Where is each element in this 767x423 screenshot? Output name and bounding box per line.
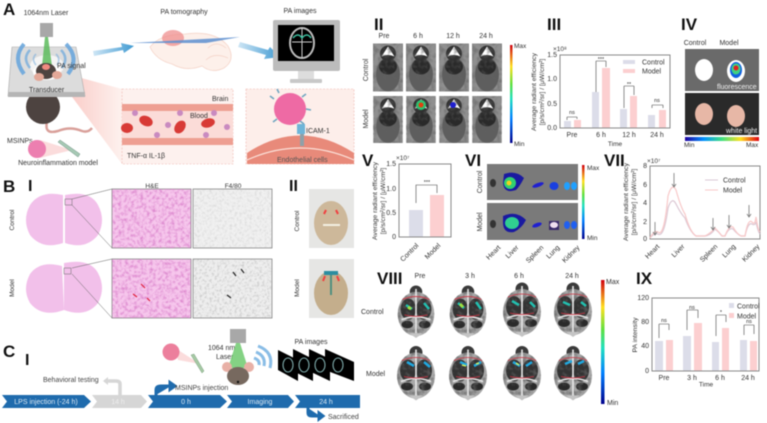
bars bbox=[409, 195, 444, 237]
significance brackets: ** bbox=[627, 82, 632, 88]
heading: IX: IX bbox=[636, 269, 653, 288]
row label: control: Control bbox=[477, 170, 484, 193]
x tick labels: 24 h bbox=[650, 132, 664, 139]
panel VI: organ fluorescence bbox=[465, 151, 600, 265]
label: PA images: PA images bbox=[295, 339, 328, 346]
organ labels: Lung bbox=[721, 243, 737, 259]
y tick labels: 0 bbox=[645, 368, 649, 375]
label: H&E: H&E bbox=[145, 183, 159, 190]
image: fluorescence bbox=[685, 49, 759, 91]
label: blood: Blood bbox=[190, 113, 208, 120]
label: neuroinflammation model: Neuroinflammation model bbox=[18, 160, 98, 167]
y tick labels: 0 bbox=[643, 236, 647, 243]
significance brackets: * bbox=[720, 310, 723, 316]
icon: PA signal waves bbox=[18, 44, 74, 74]
column labels: Pre bbox=[415, 273, 426, 280]
legend: Control bbox=[642, 60, 665, 66]
row label: control II: Control bbox=[294, 210, 301, 231]
panel V: brain bar chart bbox=[362, 151, 451, 263]
heading: A: A bbox=[3, 0, 15, 19]
column labels: 6 h bbox=[514, 273, 524, 280]
y tick labels: 8 bbox=[643, 163, 647, 170]
heading: V: V bbox=[362, 151, 374, 170]
panel IX: PA intensity bar chart bbox=[632, 269, 760, 388]
brain images: control row bbox=[397, 282, 593, 339]
y tick labels: 80 bbox=[641, 319, 649, 326]
x tick labels bbox=[567, 132, 664, 139]
colorbar max: Max bbox=[514, 43, 527, 50]
timeline chevron: 0 h bbox=[148, 395, 227, 408]
colorbar max: Max bbox=[587, 165, 600, 172]
image: F4/80 control bbox=[193, 189, 272, 248]
column labels: Control bbox=[684, 40, 707, 47]
label: 1064nm laser: 1064nm Laser bbox=[24, 10, 69, 17]
colorbar bbox=[685, 137, 759, 141]
significance brackets: ns bbox=[689, 305, 695, 311]
legend: Model bbox=[723, 188, 743, 194]
y tick labels: 4 bbox=[643, 200, 647, 207]
colorbar max: Max bbox=[746, 142, 759, 149]
label: laser: Laser bbox=[216, 354, 234, 361]
column labels bbox=[379, 33, 493, 40]
timeline chevron: LPS injection bbox=[2, 395, 91, 408]
colorbar bbox=[601, 280, 604, 404]
organ labels bbox=[485, 244, 582, 265]
y tick labels: 2 bbox=[643, 219, 647, 226]
mouse images: control row bbox=[373, 44, 502, 92]
organ labels: Kidney bbox=[741, 243, 762, 264]
panel II: whole-body fluorescence bbox=[363, 15, 527, 148]
y-axis units: [p/s/cm²/sr] / [μW/cm²] bbox=[539, 59, 546, 125]
organ labels bbox=[644, 243, 762, 264]
label: sacrificed: Sacrificed bbox=[328, 414, 359, 421]
heading: VI: VI bbox=[465, 151, 481, 170]
legend bbox=[705, 178, 746, 194]
row label: control: Control bbox=[361, 309, 384, 316]
row label: model: Model bbox=[366, 371, 386, 378]
label: F4/80: F4/80 bbox=[225, 183, 242, 190]
legend: Model bbox=[642, 68, 662, 76]
row label: model II: Model bbox=[294, 279, 301, 297]
axis multiplier: ×10⁷ bbox=[396, 155, 410, 162]
image: control organs bbox=[487, 164, 578, 200]
column labels: Pre bbox=[379, 33, 390, 40]
y-axis units: [p/s/cm²/sr] / [μW/cm²] bbox=[631, 169, 638, 235]
timeline chevron: LPS injection: LPS injection (-24 h) bbox=[14, 399, 78, 406]
arrowhead: behavioral testing bbox=[103, 377, 108, 385]
panel IV: ex vivo brains bbox=[681, 15, 759, 149]
heading: C I: I bbox=[25, 352, 29, 369]
x tick labels: Control bbox=[399, 242, 421, 263]
zoom lines bbox=[64, 189, 112, 318]
organ labels: Lung bbox=[545, 244, 561, 260]
timeline chevron: imaging: Imaging bbox=[248, 399, 273, 406]
y-axis title: PA intensity bbox=[632, 317, 639, 353]
image: F4/80 model bbox=[193, 259, 272, 318]
timeline chevron: 14 h bbox=[92, 395, 147, 408]
y tick labels: 1.5 bbox=[547, 52, 557, 59]
heading: IV: IV bbox=[681, 15, 698, 34]
colorbar min: Min bbox=[607, 400, 618, 407]
icon: laser head bbox=[230, 329, 246, 343]
label: MSINPs: MSINPs bbox=[7, 138, 33, 145]
column labels: 24 h bbox=[565, 273, 579, 280]
image: model organs bbox=[487, 203, 578, 240]
image: white light bbox=[685, 93, 759, 135]
column labels: 6 h bbox=[413, 33, 423, 40]
organ labels: Liver bbox=[505, 244, 521, 260]
x tick labels: 6 h bbox=[715, 375, 725, 382]
bars bbox=[655, 323, 757, 371]
y tick labels: 1.0 bbox=[386, 186, 396, 193]
x tick labels: 24 h bbox=[741, 375, 755, 382]
significance brackets: *** bbox=[598, 57, 605, 63]
heading: C: C bbox=[3, 342, 15, 361]
label: brain: Brain bbox=[212, 96, 228, 103]
panel B: histology bbox=[3, 177, 354, 318]
significance brackets bbox=[659, 305, 754, 338]
label: white light: white light bbox=[725, 128, 757, 135]
axes and ticks bbox=[560, 55, 670, 128]
column labels: 12 h bbox=[446, 33, 460, 40]
legend: Model bbox=[737, 314, 757, 320]
organ labels: Heart bbox=[485, 244, 502, 262]
panel A: photoacoustic workflow schematic bbox=[3, 0, 354, 167]
label: transducer: Transducer bbox=[29, 87, 65, 94]
organ labels: Liver bbox=[671, 243, 687, 259]
y tick labels: 1.0 bbox=[547, 76, 557, 83]
photo: model brain bbox=[309, 259, 354, 318]
y tick labels: 0.5 bbox=[547, 101, 557, 108]
timeline chevron: 24 h: 24 h bbox=[319, 399, 333, 406]
image stack: PA images bbox=[278, 349, 354, 381]
colorbar min: Min bbox=[514, 141, 525, 148]
label: PA images: PA images bbox=[284, 8, 317, 15]
colorbar bbox=[510, 45, 512, 143]
x tick labels bbox=[659, 375, 755, 382]
significance brackets: ns bbox=[569, 110, 575, 116]
significance brackets: ns bbox=[661, 318, 667, 324]
brain images: model row bbox=[396, 346, 593, 402]
x tick labels: 12 h bbox=[622, 132, 636, 139]
x tick labels: Model bbox=[424, 242, 443, 261]
icon: brain with imaging plane bbox=[130, 30, 240, 71]
icon: monitor with PA image bbox=[273, 20, 340, 83]
y tick labels bbox=[643, 163, 647, 243]
column labels: 24 h bbox=[479, 33, 493, 40]
image: H&E control bbox=[112, 189, 191, 248]
y tick labels: 40 bbox=[641, 343, 649, 350]
icon: laser head and beam bbox=[40, 23, 53, 66]
timeline chevron: 24 h bbox=[295, 395, 360, 408]
organ labels: Heart bbox=[644, 243, 661, 261]
icon: nanoparticle and syringe bbox=[28, 140, 80, 158]
y-axis title: Average radiant efficiency bbox=[623, 162, 630, 241]
icon: mouse with tail bbox=[26, 90, 92, 132]
y tick labels bbox=[637, 295, 649, 375]
y-axis title: Average radiant efficiency bbox=[531, 52, 538, 131]
axis multiplier: ×10⁷ bbox=[647, 158, 661, 165]
axes bbox=[650, 166, 760, 239]
row label: model: Model bbox=[9, 279, 16, 297]
column labels bbox=[415, 273, 579, 280]
icon: laser beam and mouse head bbox=[222, 343, 254, 385]
column labels: Model bbox=[719, 40, 739, 47]
x tick labels: Pre bbox=[659, 375, 670, 382]
row label: control: Control bbox=[9, 209, 16, 230]
column labels: 3 h bbox=[465, 273, 475, 280]
y tick labels: 6 bbox=[643, 182, 647, 189]
y-axis units: [p/s/cm²/sr] / [μW/cm²] bbox=[380, 168, 387, 234]
x tick labels: 3 h bbox=[687, 375, 697, 382]
y tick labels bbox=[547, 52, 557, 132]
heading: B: B bbox=[3, 177, 15, 196]
panel VIII: PA brain images bbox=[361, 269, 620, 407]
panel III: fluorescence bar chart bbox=[531, 15, 670, 148]
label: PA tomography: PA tomography bbox=[160, 9, 208, 16]
magnified wedge bbox=[52, 70, 122, 164]
panel: endothelial binding inset bbox=[246, 89, 354, 164]
arrow: MSINPs injection bbox=[156, 382, 175, 395]
significance bracket: *** bbox=[424, 180, 431, 186]
legend: Control bbox=[723, 178, 746, 184]
heading: B II: II bbox=[289, 178, 298, 195]
column labels bbox=[684, 40, 739, 47]
arrow: behavioral testing bbox=[107, 381, 120, 395]
organ labels: Kidney bbox=[561, 244, 582, 265]
y tick labels bbox=[386, 161, 396, 241]
y tick labels: 0.0 bbox=[547, 125, 557, 132]
heading: VII: VII bbox=[604, 151, 625, 170]
significance brackets: ns bbox=[746, 319, 752, 325]
transducer platform bbox=[8, 47, 85, 97]
icon: nanoparticle and syringe bbox=[162, 344, 204, 373]
label: PA signal: PA signal bbox=[57, 63, 86, 70]
arrow: to tomography bbox=[93, 43, 134, 56]
image: H&E model bbox=[112, 259, 191, 318]
heading: B I: I bbox=[28, 178, 32, 195]
timeline chevron: imaging bbox=[227, 395, 294, 408]
legend bbox=[623, 60, 665, 76]
organ labels: Spleen bbox=[699, 243, 719, 264]
panel C: experimental timeline bbox=[2, 329, 360, 421]
axes bbox=[399, 164, 451, 237]
legend bbox=[729, 303, 760, 320]
legend: Control bbox=[737, 304, 760, 310]
label: TNF-alpha and IL-1 beta: TNF-α IL-1β bbox=[127, 153, 165, 160]
organ labels: Spleen bbox=[525, 244, 545, 265]
timeline chevron: 14 h: 14 h bbox=[111, 399, 125, 406]
colorbar max: Max bbox=[606, 279, 620, 286]
colorbar min: Min bbox=[684, 142, 695, 149]
significance brackets bbox=[567, 57, 663, 120]
x tick labels bbox=[399, 242, 443, 263]
photo: control brain bbox=[309, 189, 354, 248]
arrows: organ peaks bbox=[653, 173, 751, 235]
line: control bbox=[650, 201, 760, 238]
icon: mouse head bbox=[34, 63, 62, 81]
label: endothelial cells: Endothelial cells bbox=[277, 157, 328, 164]
bars bbox=[564, 68, 666, 128]
icon: signal waves bbox=[254, 346, 271, 368]
label: 1064 nm: 1064 nm bbox=[208, 345, 235, 352]
heading: VIII: VIII bbox=[377, 269, 403, 288]
heading: III: III bbox=[547, 15, 561, 34]
heading: II: II bbox=[374, 15, 383, 34]
row label: model: Model bbox=[363, 109, 370, 129]
x-axis title: Time bbox=[699, 382, 713, 388]
axis multiplier: ×10⁸ bbox=[553, 46, 567, 53]
y-axis title: Average radiant efficiency bbox=[372, 161, 379, 240]
x tick labels: Pre bbox=[567, 132, 578, 139]
label: fluorescence: fluorescence bbox=[717, 84, 757, 91]
y tick labels: 120 bbox=[637, 295, 649, 302]
y tick labels: 1.5 bbox=[386, 161, 396, 168]
row label: model: Model bbox=[477, 212, 484, 232]
label: MSINPs injection: MSINPs injection bbox=[175, 385, 228, 392]
colorbar min: Min bbox=[587, 235, 598, 242]
brain slice: model bbox=[26, 262, 102, 313]
mouse images: model row bbox=[373, 96, 502, 143]
x-axis title: Time bbox=[608, 141, 622, 148]
y tick labels: 0.5 bbox=[386, 210, 396, 217]
arrow: sacrificed bbox=[308, 408, 323, 419]
label: ICAM-1: ICAM-1 bbox=[306, 128, 330, 135]
timeline chevron: 0 h: 0 h bbox=[181, 399, 191, 406]
axes bbox=[652, 298, 759, 371]
colorbar bbox=[582, 165, 584, 239]
panel: blood vessel inset bbox=[121, 89, 233, 164]
y tick labels: 0 bbox=[392, 234, 396, 241]
brain slice: control bbox=[26, 194, 102, 245]
line: model bbox=[650, 187, 760, 238]
significance brackets: ns bbox=[654, 98, 660, 104]
panel VII: organ line chart bbox=[604, 151, 762, 264]
x tick labels: 6 h bbox=[596, 132, 606, 139]
label: behavioral testing: Behavioral testing bbox=[43, 377, 99, 384]
row label: control: Control bbox=[363, 58, 370, 81]
arrow: to PA images bbox=[238, 42, 280, 59]
